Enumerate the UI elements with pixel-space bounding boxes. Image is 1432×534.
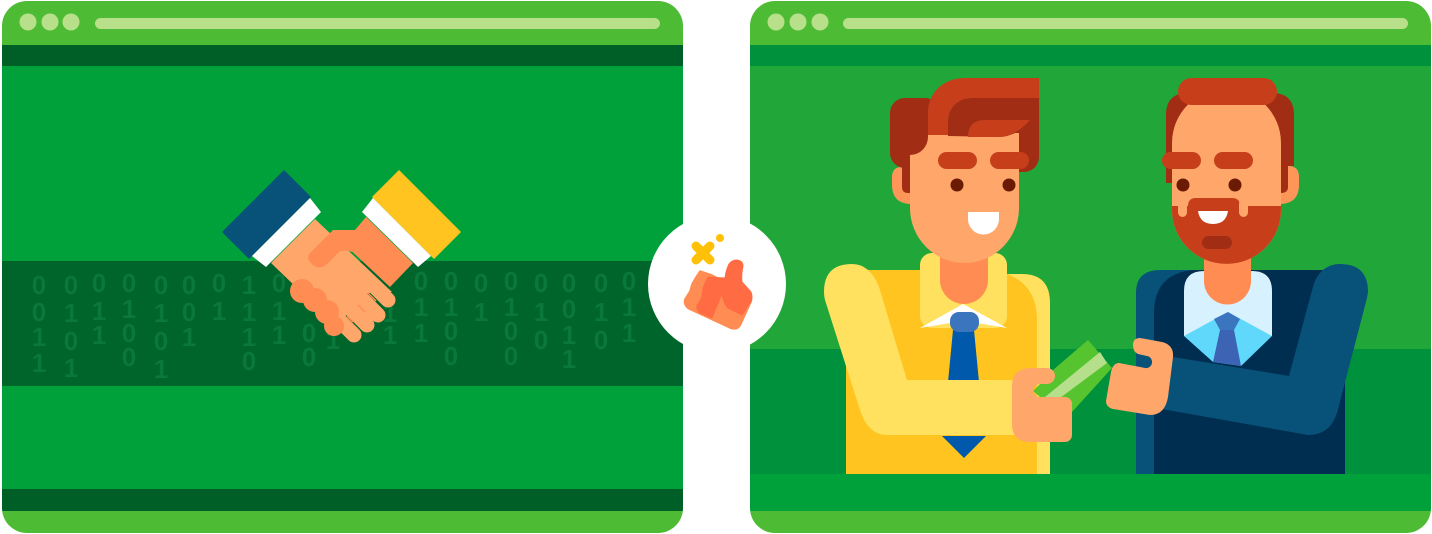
binary digits: 0 [504, 266, 518, 296]
binary digits: 0 [504, 316, 518, 346]
binary digits: 0 [92, 268, 106, 298]
binary digits: 0 [32, 297, 46, 327]
right dark forearm [345, 217, 413, 287]
binary digits: 1 [242, 322, 256, 352]
binary digits: 1 [444, 292, 458, 322]
binary digits: 0 [534, 268, 548, 298]
binary digits: 1 [414, 292, 428, 322]
dark binary band [2, 261, 683, 386]
binary digits: 0 [64, 326, 78, 356]
binary digits: 1 [212, 296, 226, 326]
binary digits: 1 [242, 270, 256, 300]
neck [940, 250, 988, 304]
left window header [2, 1, 683, 45]
binary digits: 0 [272, 268, 286, 298]
icon: thumbs up with sparkle [684, 234, 752, 329]
binary digits: 0 [562, 294, 576, 324]
left main background [2, 66, 683, 490]
binary digits: 1 [272, 296, 286, 326]
navy suit [1136, 270, 1345, 474]
cuffs [252, 198, 431, 267]
binary digits: 1 [154, 298, 168, 328]
binary digits: 0 [154, 326, 168, 356]
ear [1281, 166, 1299, 204]
lower lip [1202, 236, 1232, 249]
hand [1106, 338, 1173, 415]
binary digits: 0 [64, 270, 78, 300]
binary digits: 0 [212, 268, 226, 298]
binary digits: 1 [594, 297, 608, 327]
left window footer [2, 511, 683, 533]
binary digits: 0 [122, 342, 136, 372]
yellow suit [846, 270, 1050, 474]
shirt [1184, 271, 1272, 336]
left top dark band [2, 45, 683, 66]
binary digits: 1 [383, 320, 397, 350]
binary digits: 0 [154, 270, 168, 300]
icon: green banknote [1033, 340, 1112, 412]
face [910, 133, 1019, 263]
right top band [750, 45, 1431, 66]
binary digits: 1 [272, 320, 286, 350]
eyebrows [1162, 152, 1253, 169]
panel: right browser window [750, 1, 1431, 533]
binary digits: 0 [302, 318, 316, 348]
binary digits: 1 [534, 297, 548, 327]
top hair [1178, 78, 1277, 105]
binary digits: 1 [504, 292, 518, 322]
binary digits: 1 [562, 320, 576, 350]
binary digits: 1 [64, 298, 78, 328]
binary digits: 1 [182, 322, 196, 352]
binary digits: 0 [182, 270, 196, 300]
neck [1204, 250, 1251, 304]
binary digits: 0 [242, 346, 256, 376]
binary digits [33, 272, 636, 378]
binary digits: 1 [326, 325, 340, 355]
hand: yellow man [1012, 368, 1072, 442]
binary digits: 1 [622, 292, 636, 322]
navy sleeve [222, 170, 311, 259]
yellow sleeve [372, 170, 461, 259]
figure: man in yellow [824, 78, 1050, 474]
yellow arm [824, 264, 1020, 435]
thumb [308, 217, 392, 267]
eyes [950, 178, 1016, 192]
icon: handshake [222, 170, 461, 336]
panel: left browser window [2, 1, 683, 533]
binary digits: 1 [154, 354, 168, 384]
binary digits: 0 [504, 341, 518, 371]
binary digits: 0 [594, 325, 608, 355]
binary digits: 1 [32, 322, 46, 352]
hair [910, 78, 1039, 155]
binary digits: 0 [474, 268, 488, 298]
binary digits: 1 [32, 348, 46, 378]
binary digits: 0 [182, 297, 196, 327]
binary digits: 1 [64, 353, 78, 383]
binary digits: 1 [474, 297, 488, 327]
back hair [890, 98, 1039, 193]
right wall [750, 66, 1431, 349]
center badge circle [648, 215, 786, 353]
back hair [1166, 93, 1294, 193]
knuckles [290, 279, 344, 336]
binary digits: 0 [562, 268, 576, 298]
binary digits: 0 [122, 268, 136, 298]
right lower wall [750, 349, 1431, 474]
left bottom dark band [2, 489, 683, 511]
binary digits: 1 [92, 320, 106, 350]
binary digits: 1 [414, 318, 428, 348]
beard [1172, 198, 1281, 264]
tie [942, 312, 986, 458]
smile [1198, 211, 1228, 224]
navy arm [1162, 264, 1368, 435]
left light hand [271, 219, 392, 335]
eyebrows [938, 152, 1029, 169]
binary digits: 1 [122, 294, 136, 324]
binary digits: 0 [444, 266, 458, 296]
binary digits: 1 [92, 296, 106, 326]
sparkle [696, 234, 724, 260]
collar and tie [1184, 312, 1272, 366]
fist [684, 271, 752, 329]
binary digits: 1 [383, 298, 397, 328]
floor [750, 474, 1431, 511]
binary digits: 0 [414, 266, 428, 296]
binary digits: 0 [302, 342, 316, 372]
binary digits: 0 [122, 318, 136, 348]
binary digits: 1 [242, 297, 256, 327]
eyes [1176, 178, 1242, 192]
binary digits: 0 [32, 270, 46, 300]
binary digits: 1 [622, 318, 636, 348]
collar [920, 253, 1007, 328]
binary digits: 0 [594, 268, 608, 298]
smile [968, 212, 999, 234]
binary digits: 0 [444, 316, 458, 346]
thumb and fingers [697, 260, 752, 318]
right window header [750, 1, 1431, 45]
face [1172, 89, 1281, 264]
binary digits: 0 [622, 266, 636, 296]
binary digits: 0 [534, 325, 548, 355]
binary digits: 1 [562, 344, 576, 374]
binary digits: 0 [444, 341, 458, 371]
right window footer [750, 511, 1431, 533]
figure: bearded man in navy [1106, 78, 1368, 474]
ear [892, 167, 910, 204]
